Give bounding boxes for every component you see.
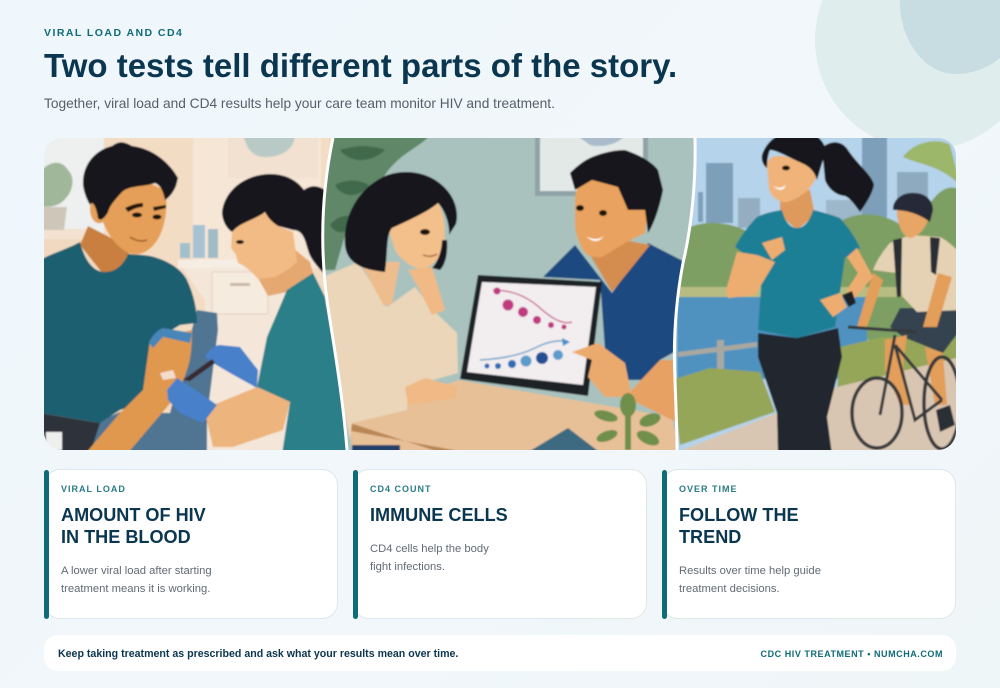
- card heading: IMMUNE CELLS: [370, 505, 508, 525]
- bushes and path: [672, 337, 960, 454]
- trees: [677, 141, 960, 340]
- pointing hand: [572, 343, 632, 397]
- card heading: [61, 505, 206, 547]
- card text: [61, 565, 212, 595]
- city skyline: [698, 134, 928, 228]
- woman in cream sweater: [325, 172, 458, 440]
- man in navy shirt: [543, 150, 685, 422]
- panel: blood draw: [40, 134, 350, 454]
- card heading: FOLLOW THE: [679, 505, 799, 525]
- card: CD4 count: [353, 469, 647, 619]
- panel: active outdoors: [670, 134, 962, 454]
- eyebrow: VIRAL LOAD AND CD4: [44, 27, 183, 39]
- icon: wall plant: [318, 134, 430, 270]
- card heading: AMOUNT OF HIV: [61, 505, 206, 525]
- illustration triptych: [44, 138, 956, 450]
- card text: Results over time help guide: [679, 565, 821, 577]
- clinic cabinets: [177, 225, 292, 454]
- nurse in scrubs: [167, 174, 350, 454]
- card label: VIRAL LOAD: [61, 484, 126, 494]
- card: over time: [662, 469, 956, 619]
- riverside fence: [678, 340, 757, 369]
- card: viral load: [44, 469, 338, 619]
- card heading: IN THE BLOOD: [61, 527, 191, 547]
- river: [676, 286, 904, 380]
- table: [350, 380, 680, 454]
- panel: reviewing results on tablet: [318, 134, 698, 454]
- icon: tabletop plant: [593, 393, 662, 450]
- footer banner: [44, 635, 956, 671]
- footer message: Keep taking treatment as prescribed and ask what your results mean over time.: [58, 648, 458, 660]
- title: Two tests tell different parts of the story.: [44, 47, 677, 84]
- cyclist: [848, 193, 960, 449]
- accent bar: [44, 470, 49, 619]
- card heading: [679, 505, 799, 547]
- card label: CD4 COUNT: [370, 484, 432, 494]
- accent bar: [662, 470, 667, 619]
- panel dividers: [323, 138, 695, 450]
- wall picture: [535, 134, 648, 196]
- tablet with viral load and CD4 trend charts: [460, 275, 602, 396]
- chart: CD4 rising: [480, 338, 570, 369]
- chart: viral load falling: [493, 288, 572, 330]
- card text: CD4 cells help the body: [370, 543, 489, 555]
- accent bar: [353, 470, 358, 619]
- card text: treatment decisions.: [679, 583, 780, 595]
- card heading: TREND: [679, 527, 741, 547]
- chair: [92, 309, 219, 450]
- man in teal shirt: [40, 142, 197, 454]
- icon: potted plant: [40, 163, 72, 230]
- card label: OVER TIME: [679, 484, 738, 494]
- woman jogging: [726, 134, 874, 454]
- card text: treatment means it is working.: [61, 583, 210, 595]
- card text: fight infections.: [370, 561, 445, 573]
- card text: A lower viral load after starting: [61, 565, 212, 577]
- subtitle: Together, viral load and CD4 results help your care team monitor HIV and treatment.: [44, 96, 555, 111]
- card text: [679, 565, 821, 595]
- card text: [370, 543, 489, 573]
- source credit: CDC HIV TREATMENT • NUMCHA.COM: [761, 649, 943, 659]
